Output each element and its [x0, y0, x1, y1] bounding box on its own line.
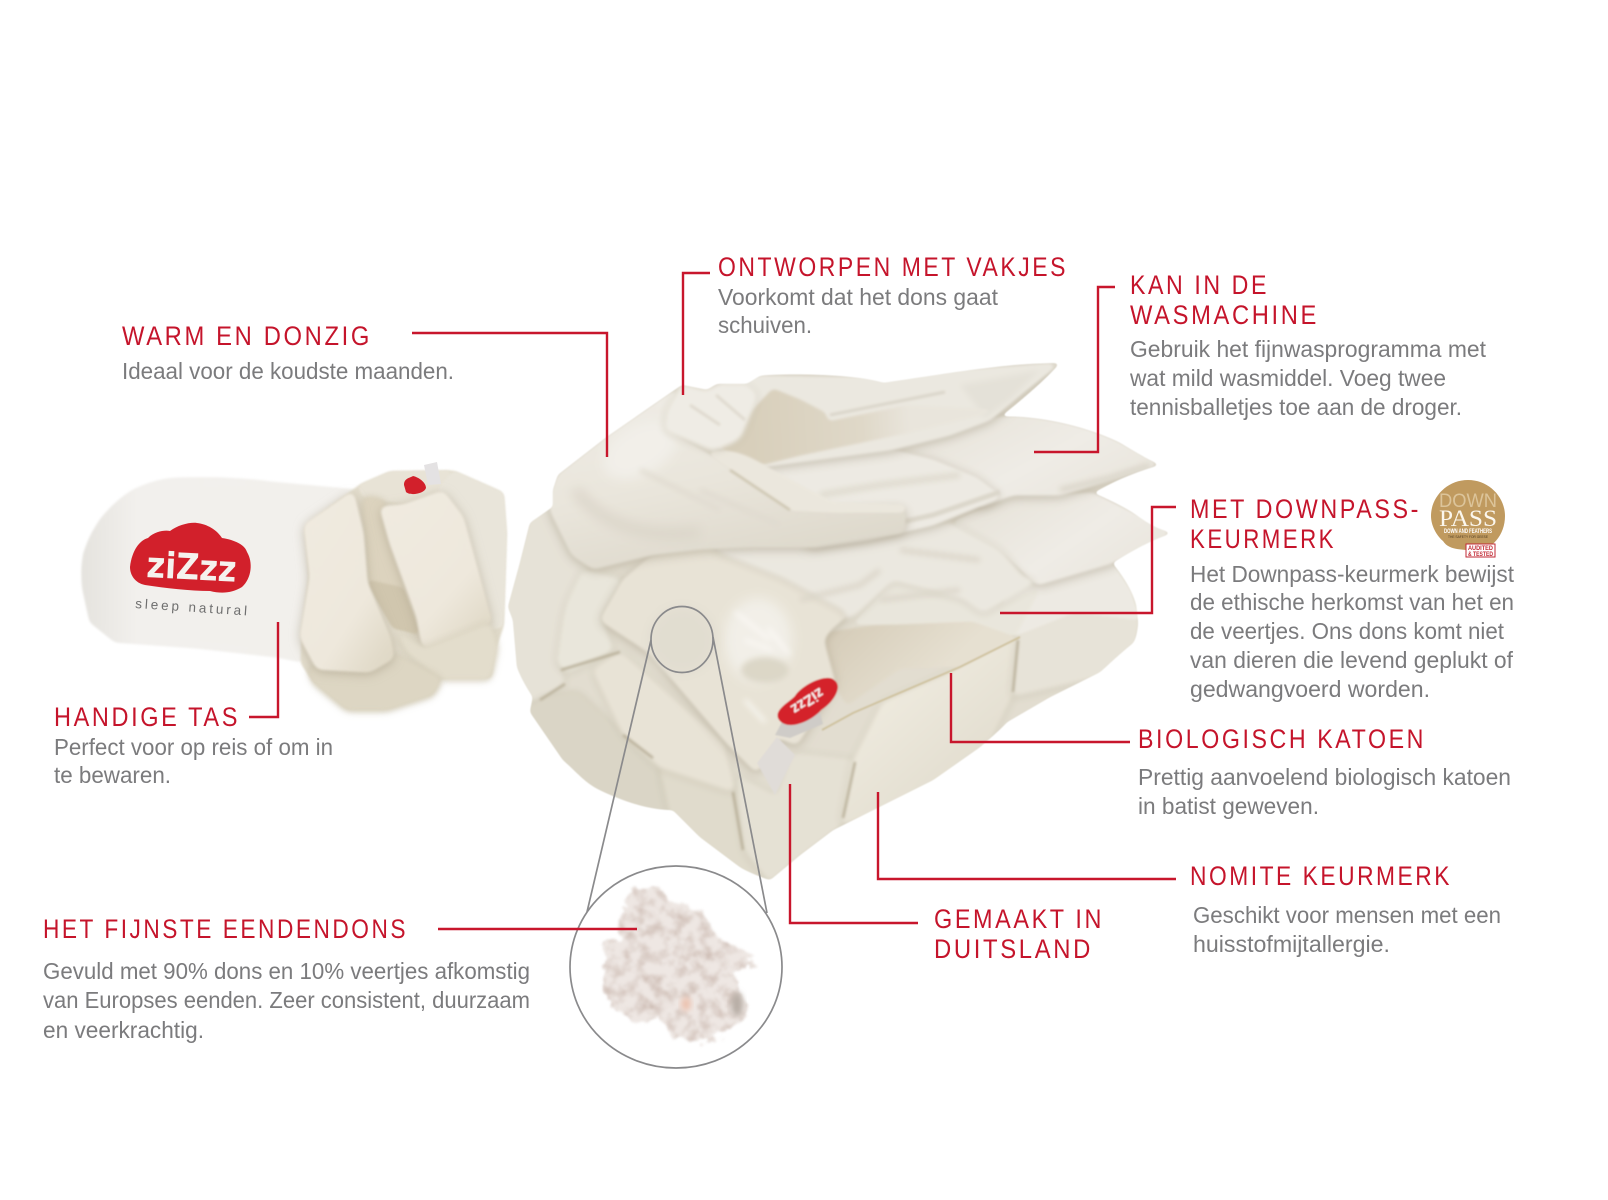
text: met downpass-keurmerk: MET DOWNPASS-	[1190, 494, 1421, 524]
white bag	[82, 478, 357, 662]
crease shadow	[366, 580, 420, 634]
bag tagline: sleep natural	[135, 596, 248, 618]
bottom right lobe	[393, 623, 497, 679]
stuffed duvet base	[301, 471, 506, 709]
text: kan in de wasmachine: KAN IN DE	[1130, 270, 1269, 300]
top pillow	[717, 363, 1060, 467]
text: biologisch katoen: BIOLOGISCH KATOEN	[1138, 724, 1426, 754]
red zizzz tag	[776, 677, 839, 726]
text: gemaakt in duitsland	[934, 904, 1104, 964]
inner column	[363, 497, 422, 640]
crumpled front flap	[600, 547, 850, 773]
text: handige tas: HANDIGE TAS	[54, 702, 240, 732]
small tab	[424, 462, 441, 485]
middle band	[623, 728, 732, 788]
text: warm en donzig: WARM EN DONZIG	[122, 321, 372, 351]
text: ontworpen met vakjes: schuiven.	[718, 312, 812, 338]
text: handige tas: te bewaren.	[54, 762, 171, 788]
big pillow	[380, 491, 492, 649]
text: kan in de wasmachine	[1129, 270, 1487, 420]
text: met downpass-keurmerk: gedwangvoerd worden.	[1190, 676, 1430, 702]
icon: downpass seal	[1431, 480, 1505, 558]
recess in top pillow	[722, 389, 900, 465]
small bag tag	[404, 476, 426, 494]
left upper section	[559, 572, 617, 667]
text: nomite keurmerk	[1190, 861, 1501, 957]
valleys between quilts	[540, 640, 1018, 850]
bottom left band	[530, 690, 664, 809]
text: biologisch katoen	[1138, 724, 1511, 819]
text: handige tas: Perfect voor op reis of om in	[54, 734, 333, 760]
text: het fijnste eendendons: Gevuld met 90% dons en 10% veertjes afkomstig	[43, 958, 530, 984]
front roll	[300, 491, 394, 672]
bottom centre section	[660, 767, 772, 885]
text: met downpass-keurmerk: de ethische herkomst van het en	[1190, 589, 1514, 615]
icon: downpass seal: THE SAFETY FOR GEESE	[1448, 534, 1488, 539]
text: met downpass-keurmerk: van dieren die levend geplukt of	[1190, 647, 1514, 673]
silver label	[775, 712, 823, 738]
text: ontworpen met vakjes	[718, 252, 1068, 338]
photo: folded duvet	[500, 360, 1180, 885]
text: biologisch katoen: in batist geweven.	[1138, 793, 1319, 819]
far right quilt section	[1015, 635, 1028, 693]
feather illustration	[605, 888, 757, 1043]
third pillow back	[950, 493, 1172, 585]
third layer front	[720, 524, 1031, 618]
top fold	[358, 471, 453, 503]
text: nomite keurmerk: Geschikt voor mensen met een	[1193, 902, 1501, 928]
text: gemaakt in duitsland: DUITSLAND	[934, 934, 1093, 964]
icon: downpass seal: AUDITED	[1468, 546, 1494, 552]
text: handige tas	[54, 702, 333, 788]
text: warm en donzig: Ideaal voor de koudste maanden.	[122, 358, 454, 384]
main front lobe	[550, 385, 905, 569]
bag logo cloud	[130, 523, 251, 593]
strip under third layer	[858, 586, 1012, 634]
velcro tab	[760, 739, 794, 792]
text: ontworpen met vakjes: Voorkomt dat het dons gaat	[718, 284, 999, 310]
second pillow back	[877, 417, 1160, 507]
text: nomite keurmerk: huisstofmijtallergie.	[1193, 931, 1390, 957]
icon: downpass seal: & TESTED	[1468, 552, 1494, 558]
text: het fijnste eendendons: HET FIJNSTE EENDENDONS	[43, 914, 408, 944]
left outer quilt section	[505, 505, 590, 700]
text: gemaakt in duitsland: GEMAAKT IN	[934, 904, 1104, 934]
photo: duvet stuffed in bag	[82, 462, 506, 710]
text: het fijnste eendendons	[43, 914, 530, 1043]
text: met downpass-keurmerk: de veertjes. Ons dons komt niet	[1190, 618, 1505, 644]
bottom section under tab	[746, 832, 768, 874]
text: kan in de wasmachine: tennisballetjes toe aan de droger.	[1130, 394, 1462, 420]
crumpled corner	[665, 385, 757, 450]
zoom circles	[570, 606, 782, 1068]
text: kan in de wasmachine: Gebruik het fijnwasprogramma met	[1130, 336, 1487, 362]
seam	[822, 637, 1020, 730]
text: met downpass-keurmerk: KEURMERK	[1190, 524, 1336, 554]
second pillow front	[760, 450, 1002, 548]
white layer above	[1016, 565, 1138, 636]
text: kan in de wasmachine: wat mild wasmiddel. Voeg twee	[1129, 365, 1446, 391]
folded strip on lobe	[707, 451, 905, 512]
bottom roll	[308, 655, 442, 710]
icon: downpass seal: PASS	[1439, 506, 1497, 531]
lower right quilt section	[845, 646, 1010, 820]
text: biologisch katoen: Prettig aanvoelend biologisch katoen	[1138, 764, 1511, 790]
text: warm en donzig	[122, 321, 454, 384]
text: met downpass-keurmerk	[1190, 494, 1515, 702]
recess under flap	[826, 624, 935, 701]
text: het fijnste eendendons: van Europses eenden. Zeer consistent, duurzaam	[43, 987, 530, 1013]
right back lobe	[438, 471, 506, 630]
text: het fijnste eendendons: en veerkrachtig.	[43, 1017, 204, 1043]
icon: downpass seal: DOWN AND FEATHERS	[1444, 529, 1492, 535]
text: met downpass-keurmerk: Het Downpass-keurmerk bewijst	[1190, 561, 1515, 587]
red zizzz tag: ziZzz	[788, 684, 827, 718]
infographic canvas	[43, 257, 1514, 1069]
text: ontworpen met vakjes: ONTWORPEN MET VAKJES	[718, 252, 1068, 282]
text: kan in de wasmachine: WASMACHINE	[1130, 300, 1319, 330]
icon: downpass seal: DOWN	[1439, 491, 1497, 512]
leader lines	[249, 273, 1176, 929]
text: nomite keurmerk: NOMITE KEURMERK	[1190, 861, 1452, 891]
bag logo wordmark: ziZzz	[146, 545, 238, 591]
